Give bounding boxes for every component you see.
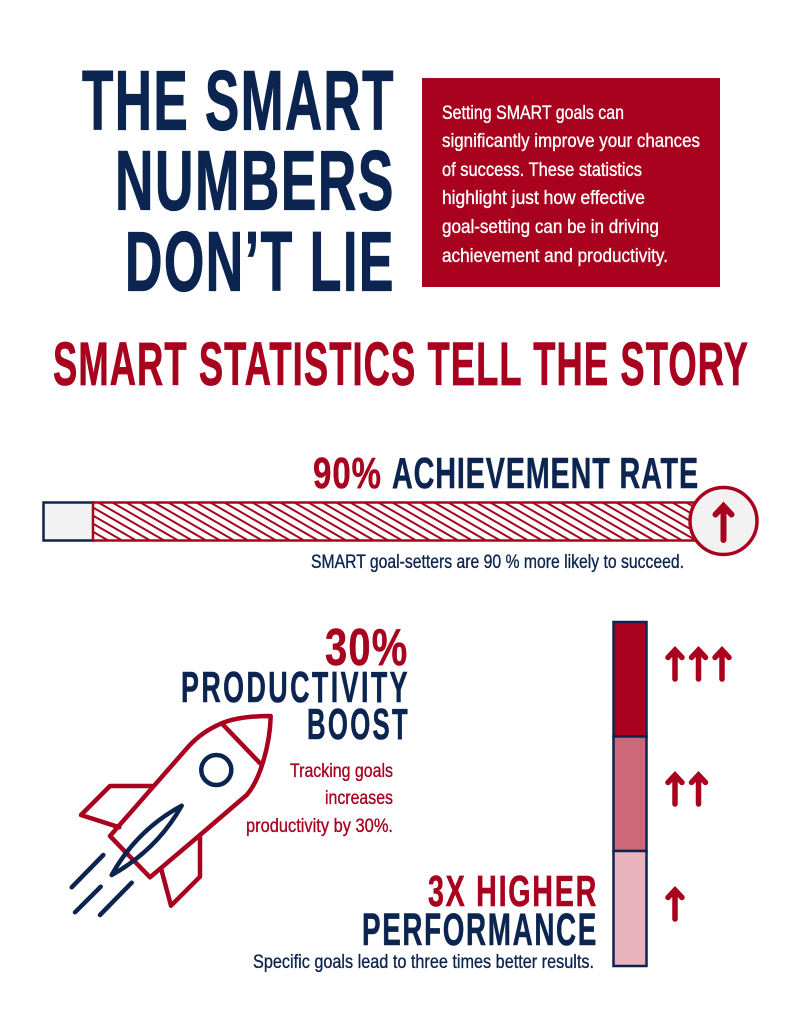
icon: circled up arrow	[690, 488, 757, 554]
stat heading: productivity boost	[181, 663, 410, 749]
panel: intro callout: Setting SMART goals can	[442, 102, 624, 124]
panel: intro callout: goal-setting can be in driving	[442, 216, 659, 238]
stat heading: productivity boost: PRODUCTIVITY	[181, 663, 410, 712]
stat value: 30%: 30%	[325, 619, 408, 677]
caption: productivity: productivity by 30%.	[246, 815, 393, 837]
panel: intro callout: highlight just how effective	[442, 187, 645, 209]
stat heading: 90% achievement rate: 90%	[313, 449, 382, 498]
title: THE SMART	[82, 54, 395, 148]
panel: intro callout: significantly improve your chances	[442, 130, 700, 152]
panel: 30% productivity boost	[72, 619, 410, 915]
stat heading: productivity boost: BOOST	[307, 700, 410, 749]
stacked level bar	[614, 622, 646, 966]
panel: intro callout: of success. These statistics	[442, 159, 642, 181]
caption: productivity: increases	[325, 787, 393, 809]
icon: three up arrows	[668, 650, 729, 679]
icon: two up arrows	[668, 775, 706, 804]
icon: one up arrow	[668, 890, 682, 919]
caption: 90%: SMART goal-setters are 90 % more likely to succeed.	[311, 551, 684, 573]
panel: intro callout: achievement and productivity.	[442, 245, 668, 267]
title	[82, 54, 395, 308]
title: NUMBERS	[115, 134, 395, 228]
panel: 90% achievement rate	[44, 449, 757, 573]
caption: performance: Specific goals lead to three times better results.	[253, 951, 594, 973]
progress bar	[44, 502, 703, 540]
title: DON’T LIE	[125, 214, 395, 308]
stat heading: 90% achievement rate	[313, 449, 699, 498]
caption: productivity: Tracking goals	[290, 760, 393, 782]
stat heading: performance: PERFORMANCE	[362, 904, 598, 955]
caption: productivity	[246, 760, 393, 837]
panel: intro callout	[422, 78, 720, 287]
icon: rocket	[72, 716, 271, 915]
stat heading: 3x higher: 3X HIGHER	[428, 867, 598, 916]
panel: 3x higher performance	[253, 622, 729, 973]
